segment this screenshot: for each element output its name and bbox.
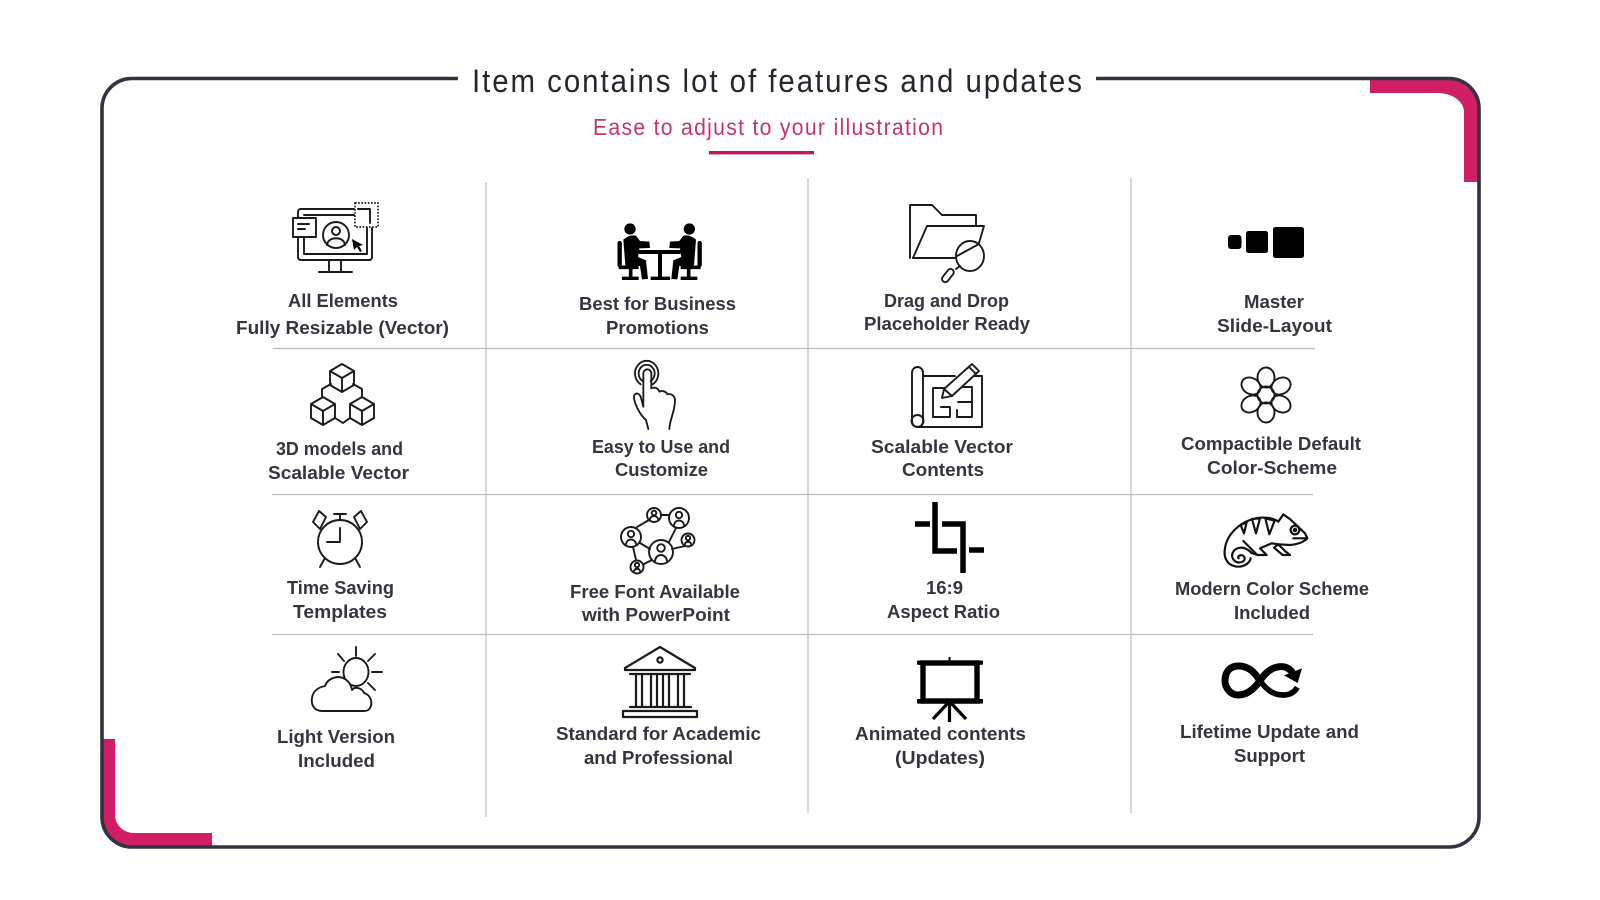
label [864,291,1030,334]
feature: animated contents [855,657,1026,768]
label [579,294,736,338]
label [236,291,449,338]
label [570,582,740,625]
feature: 3D models [268,364,409,483]
icon: monitor with user and resize frame [293,203,378,272]
label: Included [1234,603,1310,623]
label: Time Saving [287,578,394,598]
feature: easy to use [592,361,730,480]
feature: modern colour scheme [1175,514,1369,623]
feature: time saving [287,511,394,622]
label [855,724,1026,768]
icon: sun behind cloud [312,647,382,711]
feature: aspect ratio [887,502,1000,622]
label: Free Font Available [570,582,740,602]
label: Light Version [277,727,395,747]
icon: three growing squares [1228,227,1304,258]
feature: business promotions [579,223,736,338]
label: Promotions [606,318,709,338]
label [871,437,1013,480]
label: Customize [615,460,708,480]
label: Slide-Layout [1217,316,1332,336]
label: Scalable Vector [268,463,409,483]
label: Master [1244,292,1304,312]
label: Included [298,751,375,771]
icon: three cubes [311,364,374,425]
label: 16:9 [926,578,963,598]
feature: free font [570,508,740,625]
icon: classical building [623,647,697,717]
label [268,439,409,483]
feature: drag and drop [864,205,1030,334]
feature: academic and professional [556,647,761,768]
label: Easy to Use and [592,437,730,457]
accent: bottom-left pink corner [102,739,212,847]
label: with PowerPoint [581,605,730,625]
label [1175,579,1369,623]
label: Best for Business [579,294,736,314]
feature: default colour scheme [1181,368,1361,478]
label: Lifetime Update and [1180,722,1359,742]
title: Item contains lot of features and updates [472,63,1082,99]
icon: blueprint and pencil [912,364,982,427]
feature: lifetime update [1180,666,1359,766]
label: and Professional [584,748,733,768]
label: Color-Scheme [1207,458,1337,478]
subtitle underline [709,151,814,154]
label [556,724,761,768]
label: Compactible Default [1181,434,1361,454]
label [287,578,394,622]
label: Modern Color Scheme [1175,579,1369,599]
label [1217,292,1332,336]
icon: people network [621,508,694,574]
label: Scalable Vector [871,437,1013,457]
icon: tapping hand [634,361,675,429]
label [592,437,730,480]
icon: infinity with arrow [1225,666,1302,695]
label: All Elements [288,291,398,311]
panel: rounded frame [102,78,1479,847]
subtitle: Ease to adjust to your illustration [593,114,943,140]
label [1181,434,1361,478]
accent: top-right pink corner [1370,79,1479,182]
icon: alarm clock [313,511,367,567]
icon: folder with magnifier [910,205,984,283]
icon: two people at a table [619,223,701,279]
label: (Updates) [895,748,985,768]
feature: light version [277,647,395,771]
label [887,578,1000,622]
feature: master slide layout [1217,227,1332,336]
label: Placeholder Ready [864,314,1030,334]
label: Animated contents [855,724,1026,744]
label [277,727,395,771]
icon: flower [1238,368,1294,422]
icon: crop marks [915,502,984,573]
feature: all elements resizable [236,203,449,338]
label [1180,722,1359,766]
label: Templates [293,602,387,622]
label: Contents [902,460,984,480]
icon: projection screen [917,657,983,722]
label: Fully Resizable (Vector) [236,318,449,338]
icon: chameleon [1225,514,1307,567]
feature: scalable vector contents [871,364,1013,480]
label: 3D models and [276,439,403,459]
label: Standard for Academic [556,724,761,744]
label: Drag and Drop [884,291,1009,311]
label: Aspect Ratio [887,602,1000,622]
label: Support [1234,746,1305,766]
